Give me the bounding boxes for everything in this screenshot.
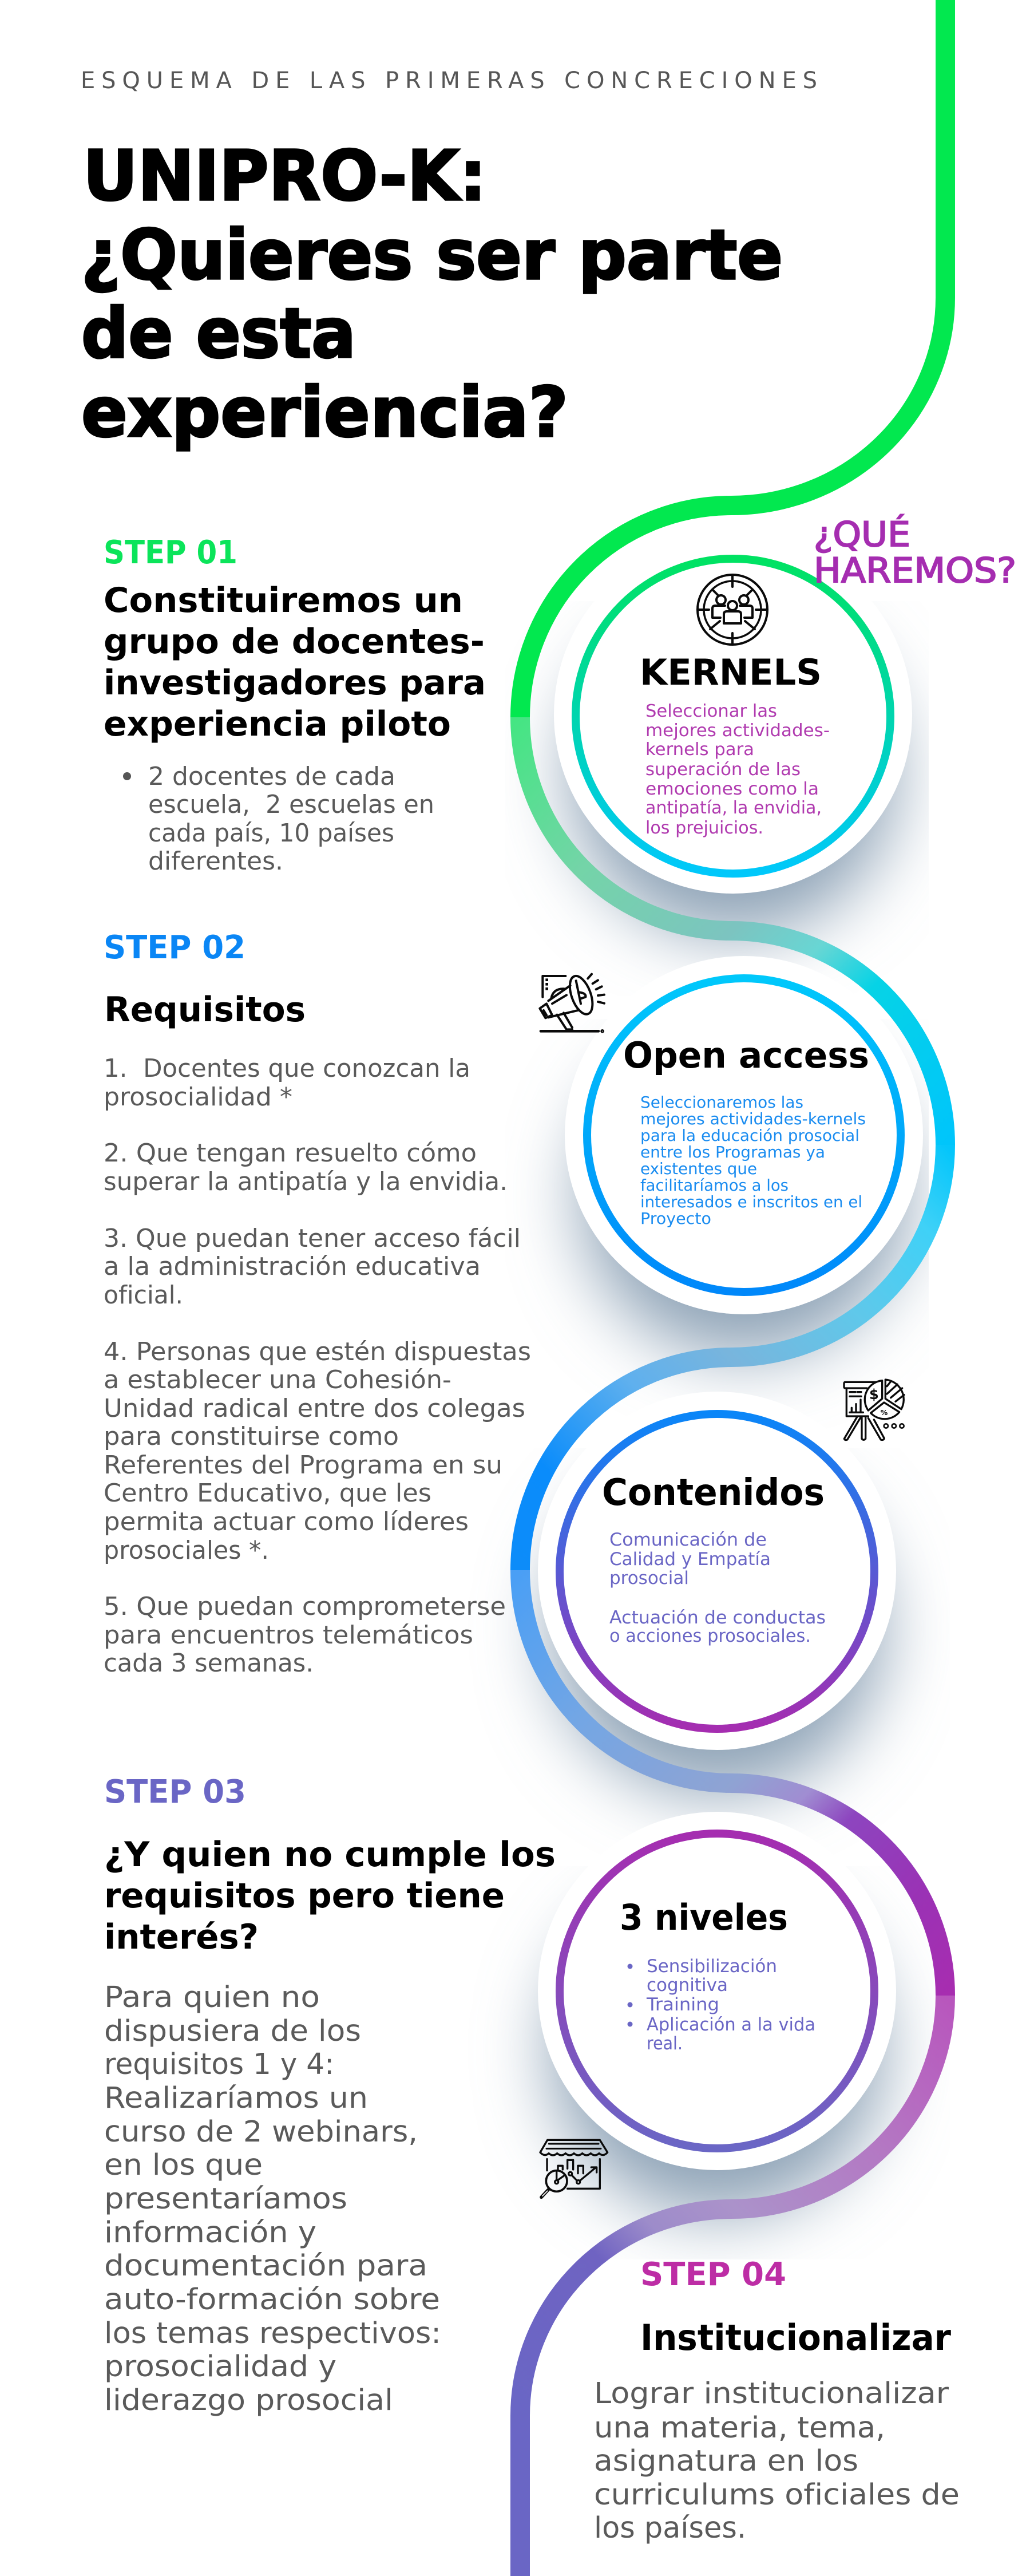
requirements list: a establecer una Cohesión- (104, 1365, 451, 1394)
circle description: o acciones prosociales. (609, 1626, 811, 1646)
step 03 label: STEP 03 (104, 1773, 246, 1811)
requirements list: 5. Que puedan comprometerse (104, 1592, 506, 1621)
step 01 bullet text: cada país, 10 países (148, 819, 394, 848)
callout: que haremos: ¿QUÉ (814, 513, 910, 555)
main title (81, 137, 783, 453)
step 03 body text: curso de 2 webinars, (104, 2115, 418, 2149)
circle description: Comunicación de (609, 1530, 767, 1550)
levels list: Sensibilización (647, 1956, 777, 1977)
circle description: mejores actividades-kernels (640, 1109, 866, 1128)
soft circle shadows (551, 610, 907, 2215)
circle description: Seleccionaremos las (640, 1093, 803, 1112)
step 03 body text: dispusiera de los (104, 2014, 361, 2048)
panel: step 04 (594, 2256, 960, 2545)
requirements list: Unidad radical entre dos colegas (104, 1394, 525, 1423)
icon: presentation board with pie chart: $ (869, 1386, 879, 1402)
step 04 body text: una materia, tema, (594, 2411, 885, 2445)
step 01 bullet text (123, 762, 434, 876)
step 03 body text: prosocialidad y (104, 2350, 336, 2384)
step 04 body text: asignatura en los (594, 2444, 858, 2478)
circle description (645, 701, 830, 838)
requirements list: oficial. (104, 1281, 183, 1310)
requirements list: 2. Que tengan resuelto cómo (104, 1139, 477, 1168)
winding gradient path (520, 0, 945, 2576)
circle description (640, 1093, 866, 1228)
step 01 label: STEP 01 (104, 534, 237, 571)
eyebrow heading: ESQUEMA DE LAS PRIMERAS CONCRECIONES (81, 68, 817, 94)
circle description: Proyecto (640, 1209, 711, 1228)
step 03 heading: requisitos pero tiene (104, 1876, 505, 1916)
circle title: Open access (623, 1034, 869, 1076)
panel: step 01 (104, 534, 486, 876)
step 01 heading: investigadores para (104, 663, 486, 703)
levels list: Aplicación a la vida (647, 2014, 815, 2035)
panel: step 02 (104, 929, 531, 1678)
step 03 body text: Realizaríamos un (104, 2081, 368, 2115)
step 04 body text (594, 2377, 960, 2545)
panel: circle 3 niveles (538, 1812, 896, 2170)
circle description: Actuación de conductas (609, 1607, 826, 1628)
step 03 body text: Para quien no (104, 1981, 320, 2014)
requirements list: Referentes del Programa en su (104, 1451, 502, 1480)
requirements list: 1. Docentes que conozcan la (104, 1054, 470, 1083)
callout: que haremos (814, 513, 1016, 591)
requirements list: 3. Que puedan tener acceso fácil (104, 1224, 521, 1253)
circle description: kernels para (645, 740, 754, 760)
requirements list: Centro Educativo, que les (104, 1479, 431, 1508)
step 03 body text: presentaríamos (104, 2182, 347, 2216)
step 04 body text: curriculums oficiales de (594, 2478, 960, 2512)
circle description: entre los Programas ya (640, 1143, 825, 1161)
step 01 heading: Constituiremos un (104, 580, 463, 621)
levels list: real. (647, 2033, 683, 2054)
step 03 heading (104, 1835, 556, 1957)
step 01 heading (104, 580, 486, 744)
icon: target with people (698, 575, 767, 645)
circle description: los prejuicios. (645, 818, 763, 838)
step 03 heading: ¿Y quien no cumple los (104, 1835, 556, 1875)
step 03 body text: información y (104, 2216, 316, 2250)
panel: circle KERNELS (554, 535, 912, 894)
circle description: Calidad y Empatía (609, 1549, 771, 1570)
panel: step 03 (104, 1773, 556, 2417)
requirements list: a la administración educativa (104, 1252, 481, 1281)
requirements list: para constituirse como (104, 1422, 399, 1451)
step 01 heading: grupo de docentes- (104, 622, 485, 662)
circle description (609, 1530, 826, 1646)
panel: circle Contenidos (538, 1392, 896, 1750)
circle title: KERNELS (640, 651, 822, 693)
levels list (627, 1956, 815, 2054)
circle description: facilitaríamos a los (640, 1176, 789, 1195)
levels list: cognitiva (647, 1975, 728, 1996)
step 01 bullet text: diferentes. (148, 847, 283, 876)
icon: presentation board with pie chart: % (881, 1408, 888, 1417)
step 04 body text: los países. (594, 2511, 746, 2545)
circle description: antipatía, la envidia, (645, 798, 822, 818)
circle description: emociones como la (645, 779, 819, 799)
requirements list: permita actuar como líderes (104, 1507, 469, 1536)
circle description: para la educación prosocial (640, 1126, 859, 1145)
main title: de esta (81, 294, 356, 374)
levels list: Training (646, 1994, 719, 2015)
step 04 body text: Lograr institucionalizar (594, 2377, 949, 2411)
circle description: Seleccionar las (645, 701, 777, 721)
requirements list: prosocialidad * (104, 1082, 292, 1112)
step 03 body text: liderazgo prosocial (104, 2384, 393, 2417)
step 03 body text: requisitos 1 y 4: (104, 2048, 334, 2081)
requirements list: superar la antipatía y la envidia. (104, 1167, 508, 1196)
step 03 body text: en los que (104, 2148, 263, 2182)
panel: circle Open access (565, 956, 923, 1314)
icon: megaphone (540, 973, 604, 1032)
requirements list: prosociales *. (104, 1536, 269, 1565)
main title: experiencia? (81, 373, 568, 453)
circle description: interesados e inscritos en el (640, 1192, 862, 1211)
requirements list: para encuentros telemáticos (104, 1621, 473, 1650)
icon: presentation board with pie chart (844, 1380, 904, 1440)
circle title: Contenidos (602, 1472, 825, 1514)
circle description: existentes que (640, 1159, 757, 1178)
step 04 heading: Institucionalizar (640, 2317, 951, 2358)
callout: que haremos: HAREMOS? (814, 551, 1016, 591)
step 03 body text: los temas respectivos: (104, 2317, 441, 2350)
step 01 bullet text: 2 docentes de cada (148, 762, 395, 791)
requirements list: cada 3 semanas. (104, 1649, 314, 1678)
step 01 heading: experiencia piloto (104, 704, 451, 744)
circle description: mejores actividades- (645, 721, 830, 741)
circle description: prosocial (609, 1568, 689, 1589)
main title: UNIPRO-K: (83, 137, 486, 216)
step 04 label: STEP 04 (640, 2256, 786, 2293)
step 02 heading: Requisitos (104, 990, 306, 1030)
step 03 body text: documentación para (104, 2249, 427, 2283)
requirements list (104, 1054, 531, 1678)
circle title: 3 niveles (620, 1897, 788, 1938)
step 03 body text (104, 1981, 441, 2417)
main title: ¿Quieres ser parte (81, 216, 783, 295)
step 03 heading: interés? (104, 1917, 259, 1957)
circle description: superación de las (645, 760, 801, 780)
requirements list: 4. Personas que estén dispuestas (104, 1337, 531, 1366)
step 03 body text: auto-formación sobre (104, 2283, 440, 2317)
step 02 label: STEP 02 (104, 929, 245, 966)
icon: store with chart and magnifier (540, 2140, 608, 2197)
step 01 bullet text: escuela, 2 escuelas en (148, 790, 434, 819)
